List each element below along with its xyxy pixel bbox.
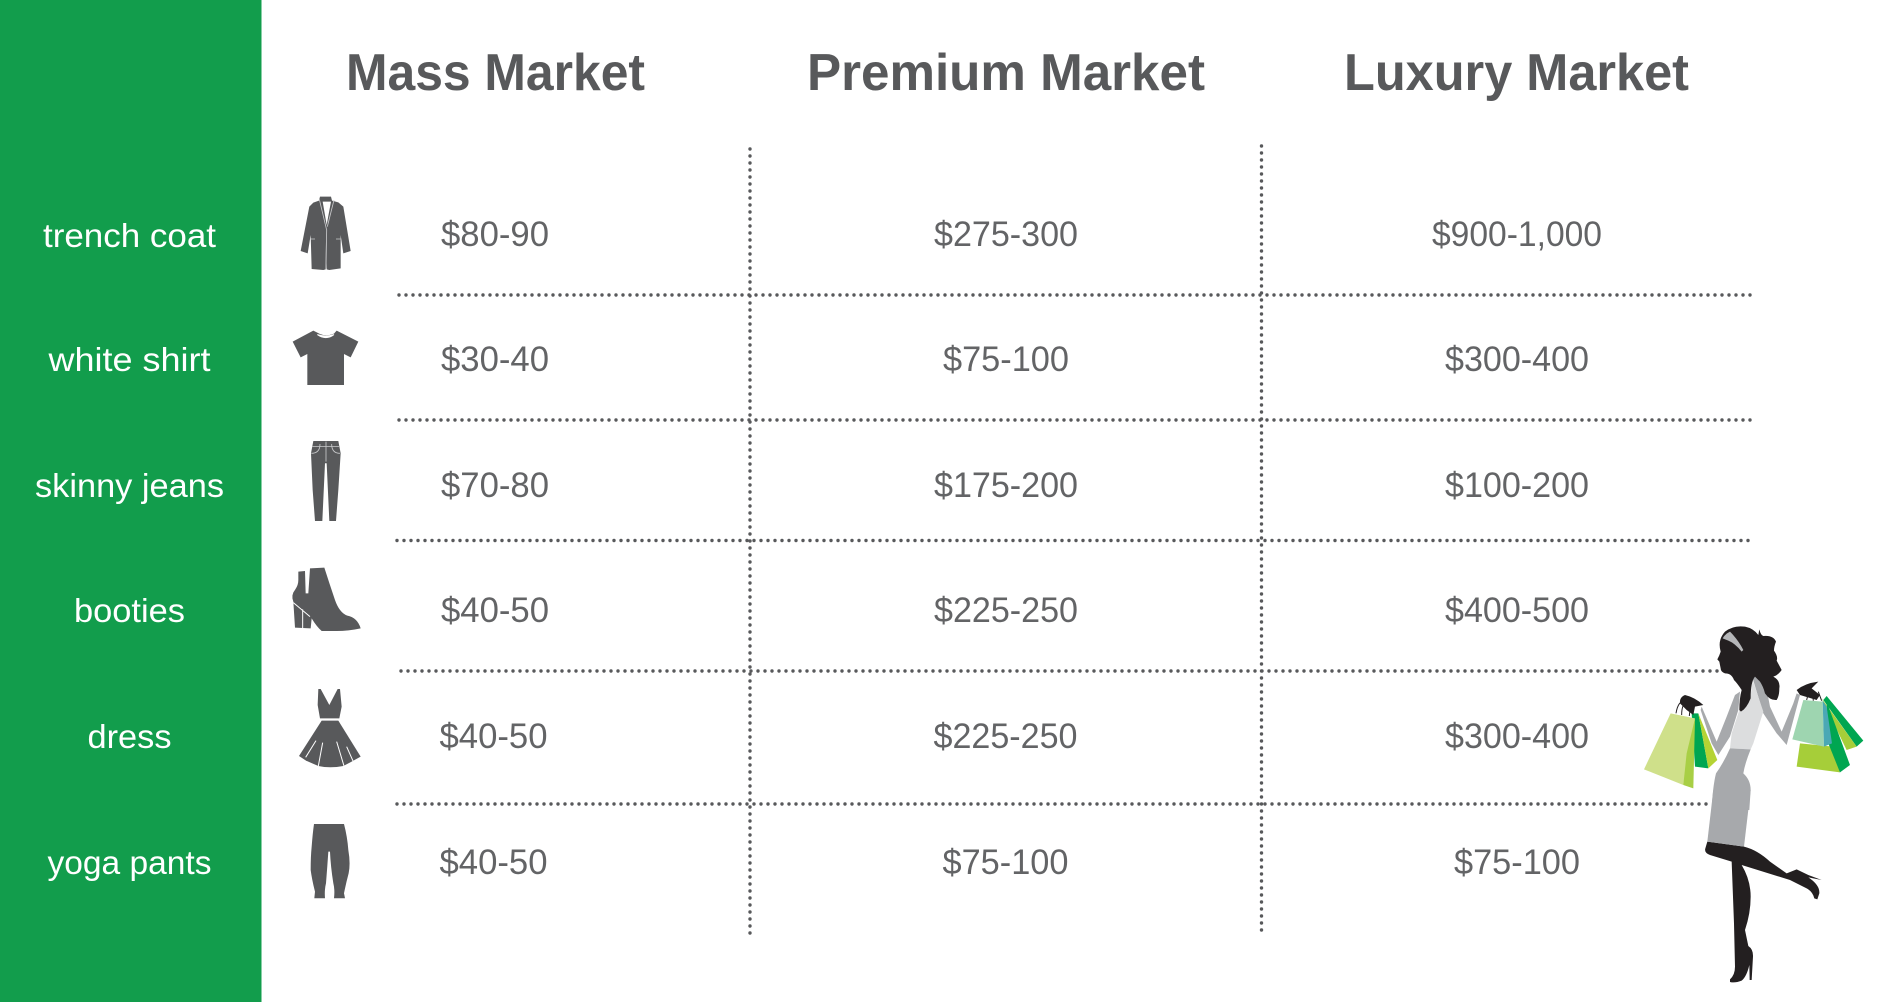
- heading: Luxury Market: Luxury Market: [1344, 44, 1689, 102]
- row: skinny jeans prices: $175-200: [934, 466, 1078, 505]
- sidebar label: white shirt: white shirt: [47, 341, 211, 378]
- icon: dress: [299, 689, 361, 767]
- row: trench coat prices: [441, 215, 1602, 254]
- heading: Mass Market: Mass Market: [346, 44, 645, 102]
- torso: [1730, 680, 1763, 749]
- row: yoga pants prices: $75-100: [1454, 843, 1580, 882]
- sidebar label: yoga pants: yoga pants: [48, 844, 212, 881]
- arms: [1701, 692, 1740, 755]
- row: yoga pants prices: [440, 843, 1580, 882]
- row: dress prices: $300-400: [1445, 717, 1589, 756]
- row: booties prices: $400-500: [1445, 591, 1589, 630]
- row: dress prices: $40-50: [440, 717, 548, 756]
- row: dress prices: [440, 717, 1589, 756]
- illustration: woman with shopping bags: [1644, 626, 1863, 982]
- row: booties prices: $225-250: [934, 591, 1078, 630]
- row: skinny jeans prices: $100-200: [1445, 466, 1589, 505]
- icon: white shirt: [293, 331, 358, 385]
- grid: dotted lines: [397, 146, 1756, 935]
- row: dress prices: $225-250: [934, 717, 1078, 756]
- skirt: [1712, 748, 1751, 810]
- sidebar label: skinny jeans: skinny jeans: [35, 467, 224, 504]
- row: trench coat prices: $900-1,000: [1432, 215, 1602, 254]
- headband: [1723, 632, 1743, 652]
- panel: green sidebar: [0, 0, 262, 1002]
- row: white shirt prices: $30-40: [441, 340, 549, 379]
- row: booties prices: [441, 591, 1589, 630]
- row: trench coat prices: $275-300: [934, 215, 1078, 254]
- icon: trench coat: [301, 197, 351, 270]
- row: booties prices: $40-50: [441, 591, 549, 630]
- icon: yoga pants: [311, 824, 350, 898]
- row: yoga pants prices: $75-100: [942, 843, 1068, 882]
- row: white shirt prices: [441, 340, 1589, 379]
- upper body and bags: [1644, 626, 1863, 810]
- row: white shirt prices: $300-400: [1445, 340, 1589, 379]
- row: white shirt prices: $75-100: [943, 340, 1069, 379]
- icon: skinny jeans: [311, 441, 341, 521]
- row: trench coat prices: $80-90: [441, 215, 549, 254]
- hair and face: [1717, 626, 1782, 712]
- legs and heels: [1705, 790, 1822, 982]
- row: skinny jeans prices: $70-80: [441, 466, 549, 505]
- row: yoga pants prices: $40-50: [440, 843, 548, 882]
- sidebar label: trench coat: trench coat: [43, 217, 216, 254]
- left hand: [1680, 695, 1703, 715]
- icon: booties: [292, 568, 361, 631]
- left bags: [1644, 701, 1717, 788]
- right bags: [1792, 692, 1863, 772]
- heading: Premium Market: Premium Market: [807, 44, 1205, 102]
- sidebar label: booties: booties: [74, 592, 185, 629]
- sidebar label: dress: dress: [88, 718, 172, 755]
- row: skinny jeans prices: [441, 466, 1589, 505]
- right hand: [1797, 682, 1820, 700]
